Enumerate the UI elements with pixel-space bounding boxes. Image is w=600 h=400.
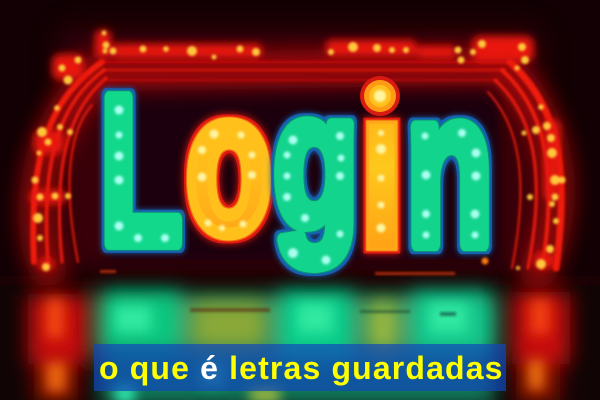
- letter o: o: [186, 50, 272, 275]
- top frame lines: [100, 62, 520, 80]
- letter n: n: [406, 46, 493, 291]
- top marquee lights bar: [30, 30, 560, 270]
- background wall: [0, 0, 600, 285]
- caption text: o que é letras guardadas: [99, 350, 504, 386]
- letter i: i: [354, 33, 411, 301]
- caption bar: [94, 344, 506, 391]
- marquee bulbs: [32, 30, 566, 271]
- Login sign lettering: [97, 84, 496, 280]
- small glow above the floor: [482, 258, 488, 264]
- left arc lines: [33, 62, 106, 262]
- letter bulbs: [114, 90, 480, 264]
- reflective floor: [0, 276, 600, 400]
- dot of the i: [360, 76, 400, 116]
- faint sign base lights: [100, 270, 455, 275]
- neon frame: [33, 62, 561, 270]
- right arc lines: [488, 62, 561, 268]
- letter L: L: [100, 53, 182, 288]
- letter g: g: [273, 52, 359, 267]
